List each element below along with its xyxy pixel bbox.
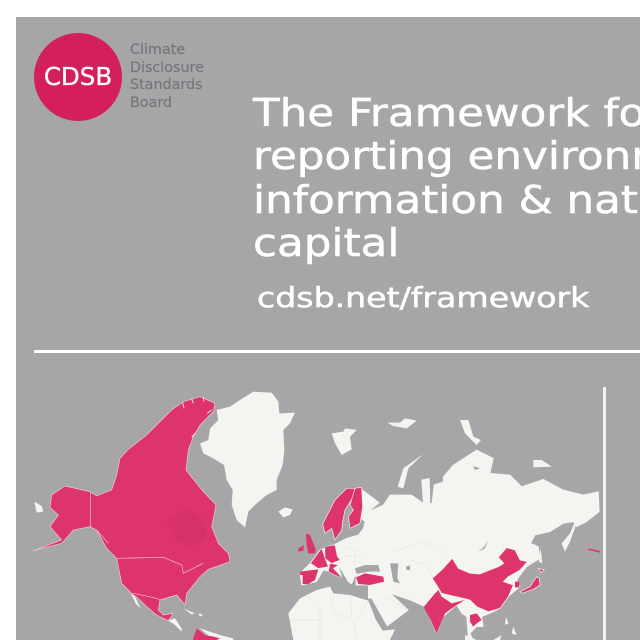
Lake Baikal bbox=[478, 540, 488, 552]
map: Americas bbox=[33, 392, 295, 640]
Finland bbox=[348, 487, 363, 528]
Greenland bbox=[200, 392, 295, 527]
UK and Ireland bbox=[298, 533, 316, 553]
Colombia bbox=[193, 628, 220, 640]
logo wordmark: Board bbox=[130, 94, 172, 110]
logo wordmark: Disclosure bbox=[130, 60, 204, 76]
Baja bbox=[131, 593, 141, 608]
vertical divider bbox=[603, 387, 606, 640]
North America bbox=[33, 397, 230, 621]
Turkey bbox=[356, 573, 384, 585]
Iceland bbox=[278, 507, 293, 517]
logo: CDSB circle: CDSB bbox=[44, 62, 112, 91]
Black Sea bbox=[355, 565, 380, 574]
Thailand bbox=[470, 613, 482, 627]
Italy bbox=[328, 563, 342, 577]
title: capital bbox=[253, 221, 399, 266]
darker interior tone bbox=[167, 508, 207, 547]
India bbox=[424, 590, 465, 633]
borders bbox=[90, 493, 203, 600]
map: Eurasia, Africa bbox=[288, 418, 600, 640]
France bbox=[311, 548, 328, 568]
Novaya Zemlya, Svalbard, Arctic islands bbox=[332, 418, 577, 552]
logo wordmark: Climate bbox=[130, 42, 185, 58]
Pacific island fragment bbox=[588, 548, 600, 553]
divider bbox=[34, 350, 640, 353]
Central America and Caribbean bbox=[168, 608, 233, 640]
Eurasia landmass bbox=[300, 450, 599, 640]
Japan bbox=[520, 568, 544, 593]
Spain bbox=[300, 569, 318, 584]
Aral Sea bbox=[406, 565, 410, 570]
China bbox=[432, 548, 527, 612]
Aleutian island bbox=[34, 502, 43, 513]
arctic coast notches bbox=[183, 397, 212, 437]
logo wordmark bbox=[130, 42, 204, 110]
South Korea bbox=[515, 582, 519, 587]
Caspian Sea bbox=[390, 563, 400, 583]
link: cdsb.net/framework bbox=[257, 282, 589, 314]
Germany bbox=[325, 545, 340, 563]
Africa bbox=[288, 587, 395, 640]
White Sea bay bbox=[473, 466, 480, 470]
logo: CDSB circle bbox=[34, 33, 122, 121]
title bbox=[252, 91, 640, 266]
Asian islands bbox=[465, 548, 542, 640]
Norway and Sweden bbox=[323, 488, 355, 540]
borders bbox=[290, 542, 450, 640]
logo wordmark: Standards bbox=[130, 77, 202, 93]
